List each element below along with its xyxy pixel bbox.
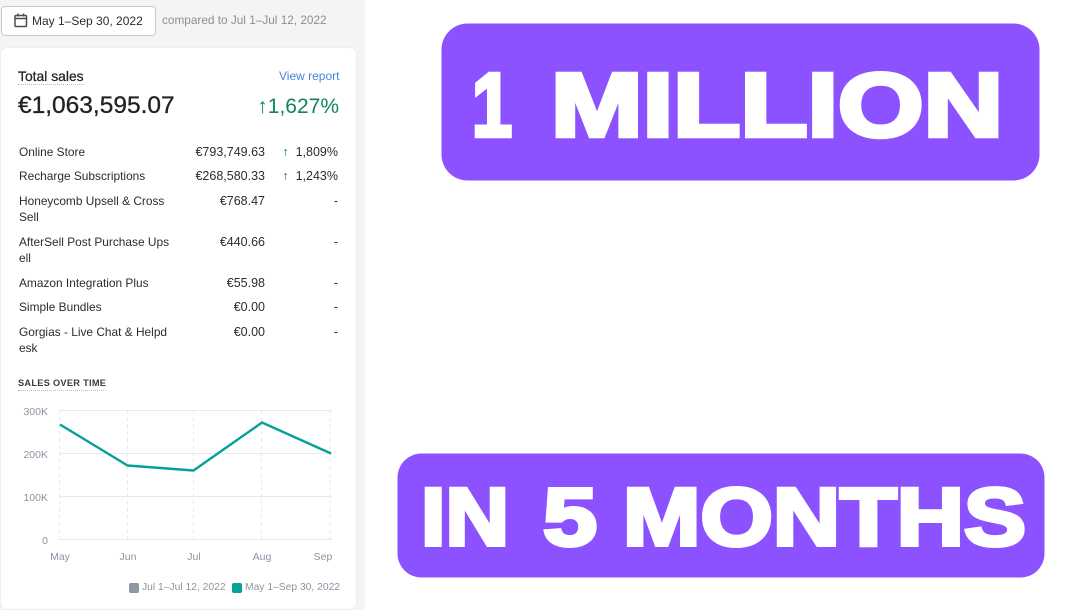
panel: total sales card bbox=[1, 48, 356, 609]
sales table: €0.00 bbox=[234, 325, 265, 339]
heading: total sales: Total sales bbox=[18, 68, 84, 84]
heading: sales over time: SALES OVER TIME bbox=[18, 378, 106, 388]
line chart: sales over time: Sep bbox=[314, 551, 332, 563]
banner: in 5 months: IN bbox=[421, 472, 509, 563]
chart legend: Jul 1–Jul 12, 2022 bbox=[142, 582, 226, 593]
line chart: sales over time: 300K bbox=[23, 406, 48, 418]
date range button bbox=[1, 6, 156, 36]
line chart: sales over time: 200K bbox=[23, 449, 48, 461]
banner: in 5 months: MONTHS bbox=[623, 472, 1026, 563]
sales table: Online Store bbox=[19, 145, 85, 159]
sales table: €768.47 bbox=[220, 194, 265, 208]
sales table: Amazon Integration Plus bbox=[19, 276, 149, 290]
sales table: Recharge Subscriptions bbox=[19, 169, 145, 183]
sales table: Simple Bundles bbox=[19, 300, 102, 314]
sales table: - bbox=[334, 276, 338, 290]
total sales value: €1,063,595.07 bbox=[18, 92, 175, 119]
icon: calendar bbox=[14, 14, 28, 28]
comparison label: compared to Jul 1–Jul 12, 2022 bbox=[162, 13, 327, 27]
sales table: AfterSell Post Purchase Ups bbox=[19, 235, 169, 249]
date range label: May 1–Sep 30, 2022 bbox=[32, 14, 143, 28]
sales table: €793,749.63 bbox=[195, 145, 265, 159]
line chart: sales over time: May bbox=[50, 551, 71, 563]
link: view report: View report bbox=[279, 69, 339, 83]
banner: in 5 months: 5 bbox=[543, 472, 597, 563]
sales table: esk bbox=[19, 341, 38, 355]
chart legend: May 1–Sep 30, 2022 bbox=[245, 582, 340, 593]
sales table: ↑ 1,243% bbox=[282, 169, 338, 183]
banner: in 5 months bbox=[398, 454, 1044, 578]
sales table: ↑ 1,809% bbox=[282, 145, 338, 159]
sales table: Honeycomb Upsell & Cross bbox=[19, 194, 164, 208]
banner: 1 million: MILLION bbox=[551, 56, 1003, 156]
sales table: - bbox=[334, 325, 338, 339]
sales table: €55.98 bbox=[227, 276, 265, 290]
line chart: sales over time: 100K bbox=[23, 492, 48, 504]
chart legend bbox=[129, 582, 340, 593]
banner: 1 million: 1 bbox=[472, 56, 512, 156]
line chart: sales over time: 0 bbox=[42, 535, 48, 547]
banner: 1 million bbox=[442, 24, 1040, 180]
sales table: Gorgias - Live Chat & Helpd bbox=[19, 325, 167, 339]
sales table: - bbox=[334, 235, 338, 249]
sales table: €440.66 bbox=[220, 235, 265, 249]
total sales change: ↑1,627% bbox=[257, 95, 339, 118]
line chart: sales over time bbox=[23, 406, 332, 563]
sales table: ell bbox=[19, 251, 31, 265]
line chart: sales over time: Jul bbox=[187, 551, 201, 563]
sales table: €0.00 bbox=[234, 300, 265, 314]
left panel background bbox=[0, 0, 365, 610]
sales table bbox=[19, 145, 338, 355]
sales table: - bbox=[334, 194, 338, 208]
line chart: sales over time: Aug bbox=[253, 551, 271, 563]
sales table: - bbox=[334, 300, 338, 314]
sales table: €268,580.33 bbox=[195, 169, 265, 183]
line chart: sales over time: Jun bbox=[120, 551, 137, 563]
sales table: Sell bbox=[19, 210, 39, 224]
